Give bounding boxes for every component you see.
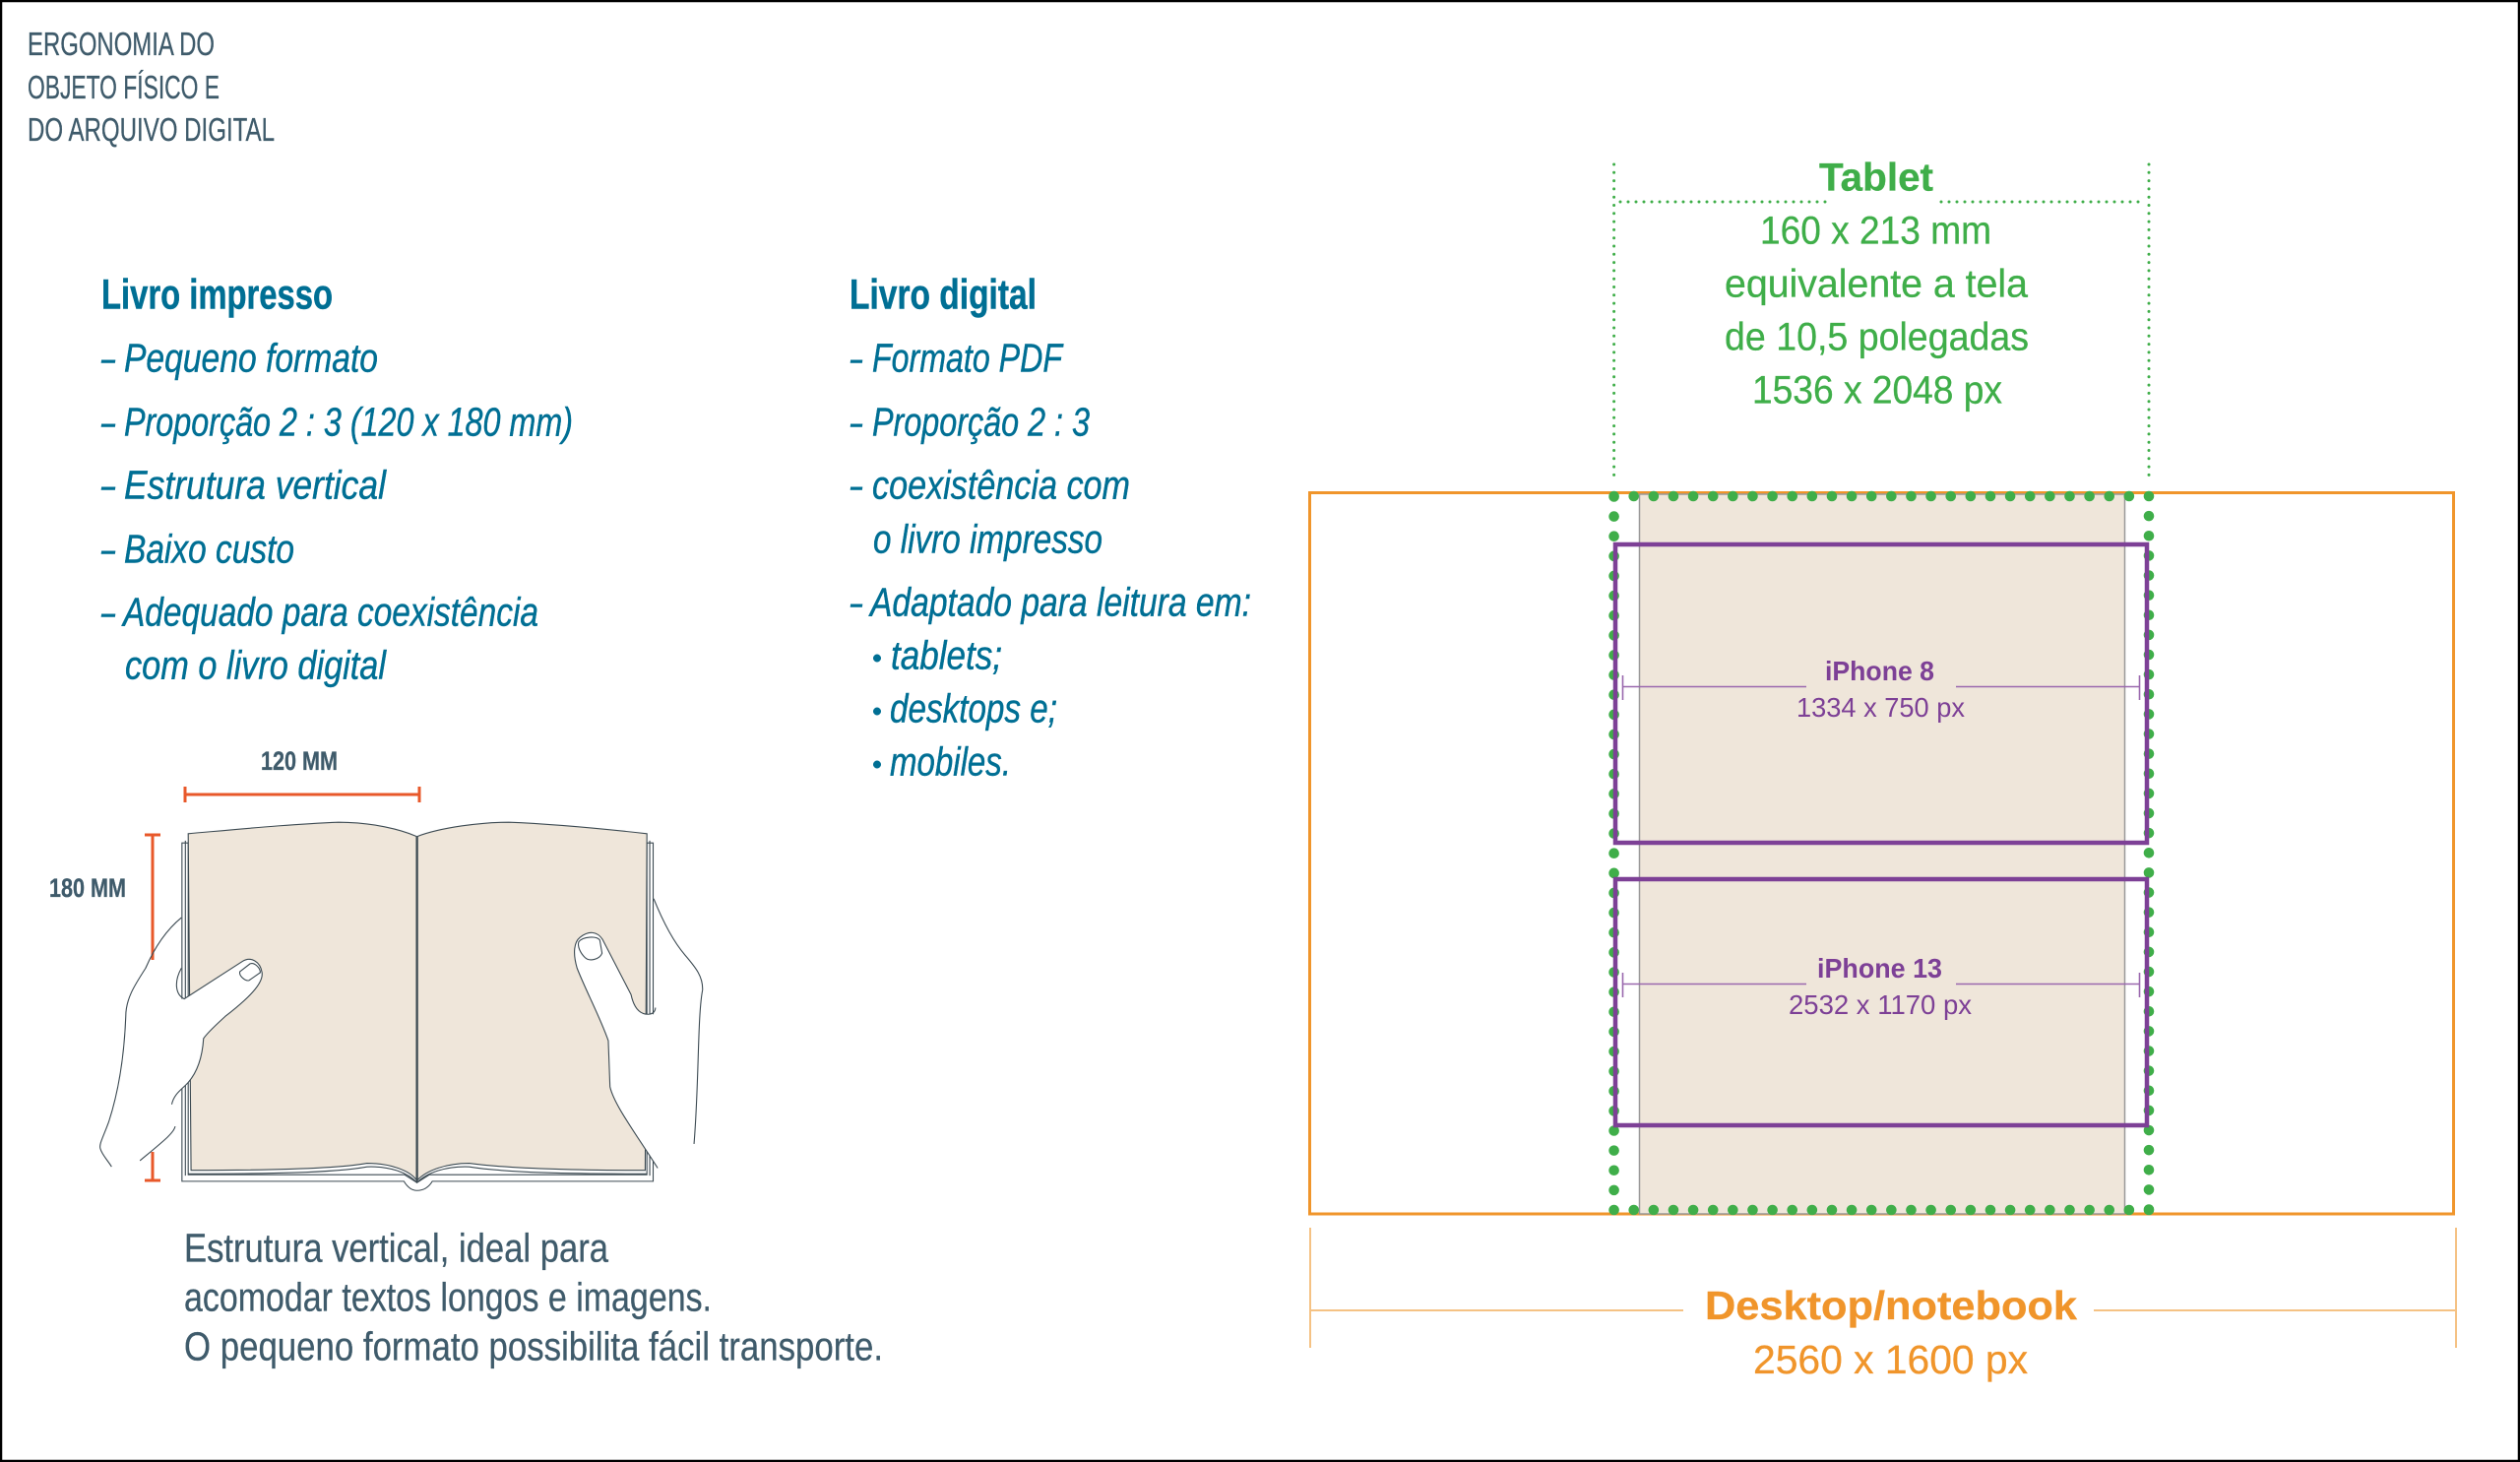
diagram: screen formats: [1309, 156, 2456, 1382]
tablet label: [1725, 156, 2029, 412]
desktop label: [1705, 1283, 2077, 1382]
list: características do livro impresso: –: [100, 463, 116, 508]
list: características do livro digital: –: [850, 335, 863, 380]
desktop label: Desktop/notebook: [1705, 1283, 2077, 1328]
left hand: [100, 918, 262, 1167]
tablet label: 160 x 213 mm: [1760, 209, 1991, 252]
title: ERGONOMIA DO: [28, 26, 215, 62]
tablet label: equivalente a tela: [1725, 262, 2029, 305]
list: características do livro digital: tablets;: [891, 632, 1002, 677]
list: características do livro digital: –: [850, 463, 863, 508]
iPhone 8 frame: 1334 x 750 px: [1796, 692, 1965, 723]
dimension: 120 mm: [185, 746, 419, 802]
title: OBJETO FÍSICO E: [28, 69, 220, 105]
caption: estrutura vertical: O pequeno formato possibilita fácil transporte.: [184, 1323, 883, 1368]
list: características do livro digital: mobiles.: [890, 738, 1011, 784]
list: características do livro impresso: –: [100, 526, 116, 571]
dimension: 180 mm: [49, 835, 160, 1180]
tablet dotted outline: [1614, 496, 2149, 1210]
list: características do livro digital: –: [850, 400, 863, 445]
dimension: 180 mm: 180 MM: [49, 873, 126, 903]
list: características do livro digital: Adaptado para leitura em:: [868, 579, 1251, 624]
list: características do livro impresso: Adequado para coexistência: [121, 589, 538, 634]
desktop dimension line: [1310, 1228, 2456, 1348]
list: características do livro impresso: –: [100, 335, 116, 380]
list: características do livro impresso: Pequeno formato: [124, 335, 378, 380]
right hand: [575, 899, 703, 1168]
iPhone 8 frame: [1615, 544, 2147, 843]
desktop label: 2560 x 1600 px: [1753, 1337, 2028, 1382]
list: características do livro digital: o livro impresso: [873, 516, 1102, 561]
iPhone 13 frame: 2532 x 1170 px: [1789, 989, 1972, 1020]
list: características do livro digital: [850, 335, 1251, 784]
caption: estrutura vertical: Estrutura vertical, ideal para: [184, 1225, 608, 1270]
illustration: open book held by two hands: [49, 746, 703, 1190]
heading: livro digital: Livro digital: [850, 272, 1037, 319]
list: características do livro digital: Proporção 2 : 3: [872, 400, 1090, 445]
caption: estrutura vertical: [184, 1225, 883, 1368]
dimension: 120 mm: 120 MM: [261, 746, 338, 776]
list: características do livro impresso: Proporção 2 : 3 (120 x 180 mm): [124, 400, 573, 445]
tablet dimension lines: [1614, 164, 2149, 479]
book page area: [1640, 494, 2124, 1214]
tablet label: Tablet: [1819, 156, 1933, 199]
list: características do livro impresso: –: [100, 400, 116, 445]
iPhone 8 frame: iPhone 8: [1825, 656, 1934, 686]
list: características do livro impresso: Estrutura vertical: [124, 463, 388, 508]
list: características do livro impresso: Baixo custo: [124, 526, 294, 571]
desktop screen outline: [1309, 492, 2453, 1214]
list: características do livro impresso: com o livro digital: [125, 642, 388, 687]
iPhone 13 frame: [1615, 879, 2147, 1125]
panel: livro digital: [850, 272, 1251, 784]
heading: livro impresso: Livro impresso: [101, 272, 333, 319]
title: DO ARQUIVO DIGITAL: [28, 111, 275, 148]
iPhone 13 frame: iPhone 13: [1817, 953, 1942, 984]
list: características do livro digital: Formato PDF: [872, 335, 1064, 380]
panel: livro impresso: [100, 272, 573, 687]
tablet label: 1536 x 2048 px: [1752, 368, 2002, 412]
list: características do livro impresso: [100, 335, 573, 687]
list: características do livro digital: desktops e;: [890, 685, 1057, 731]
tablet label: de 10,5 polegadas: [1725, 315, 2029, 358]
list: características do livro impresso: –: [100, 589, 116, 634]
list: características do livro digital: coexistência com: [872, 463, 1130, 508]
caption: estrutura vertical: acomodar textos longos e imagens.: [184, 1274, 712, 1319]
list: características do livro digital: –: [850, 579, 863, 624]
title: [28, 26, 275, 148]
book drawing: [100, 822, 703, 1190]
